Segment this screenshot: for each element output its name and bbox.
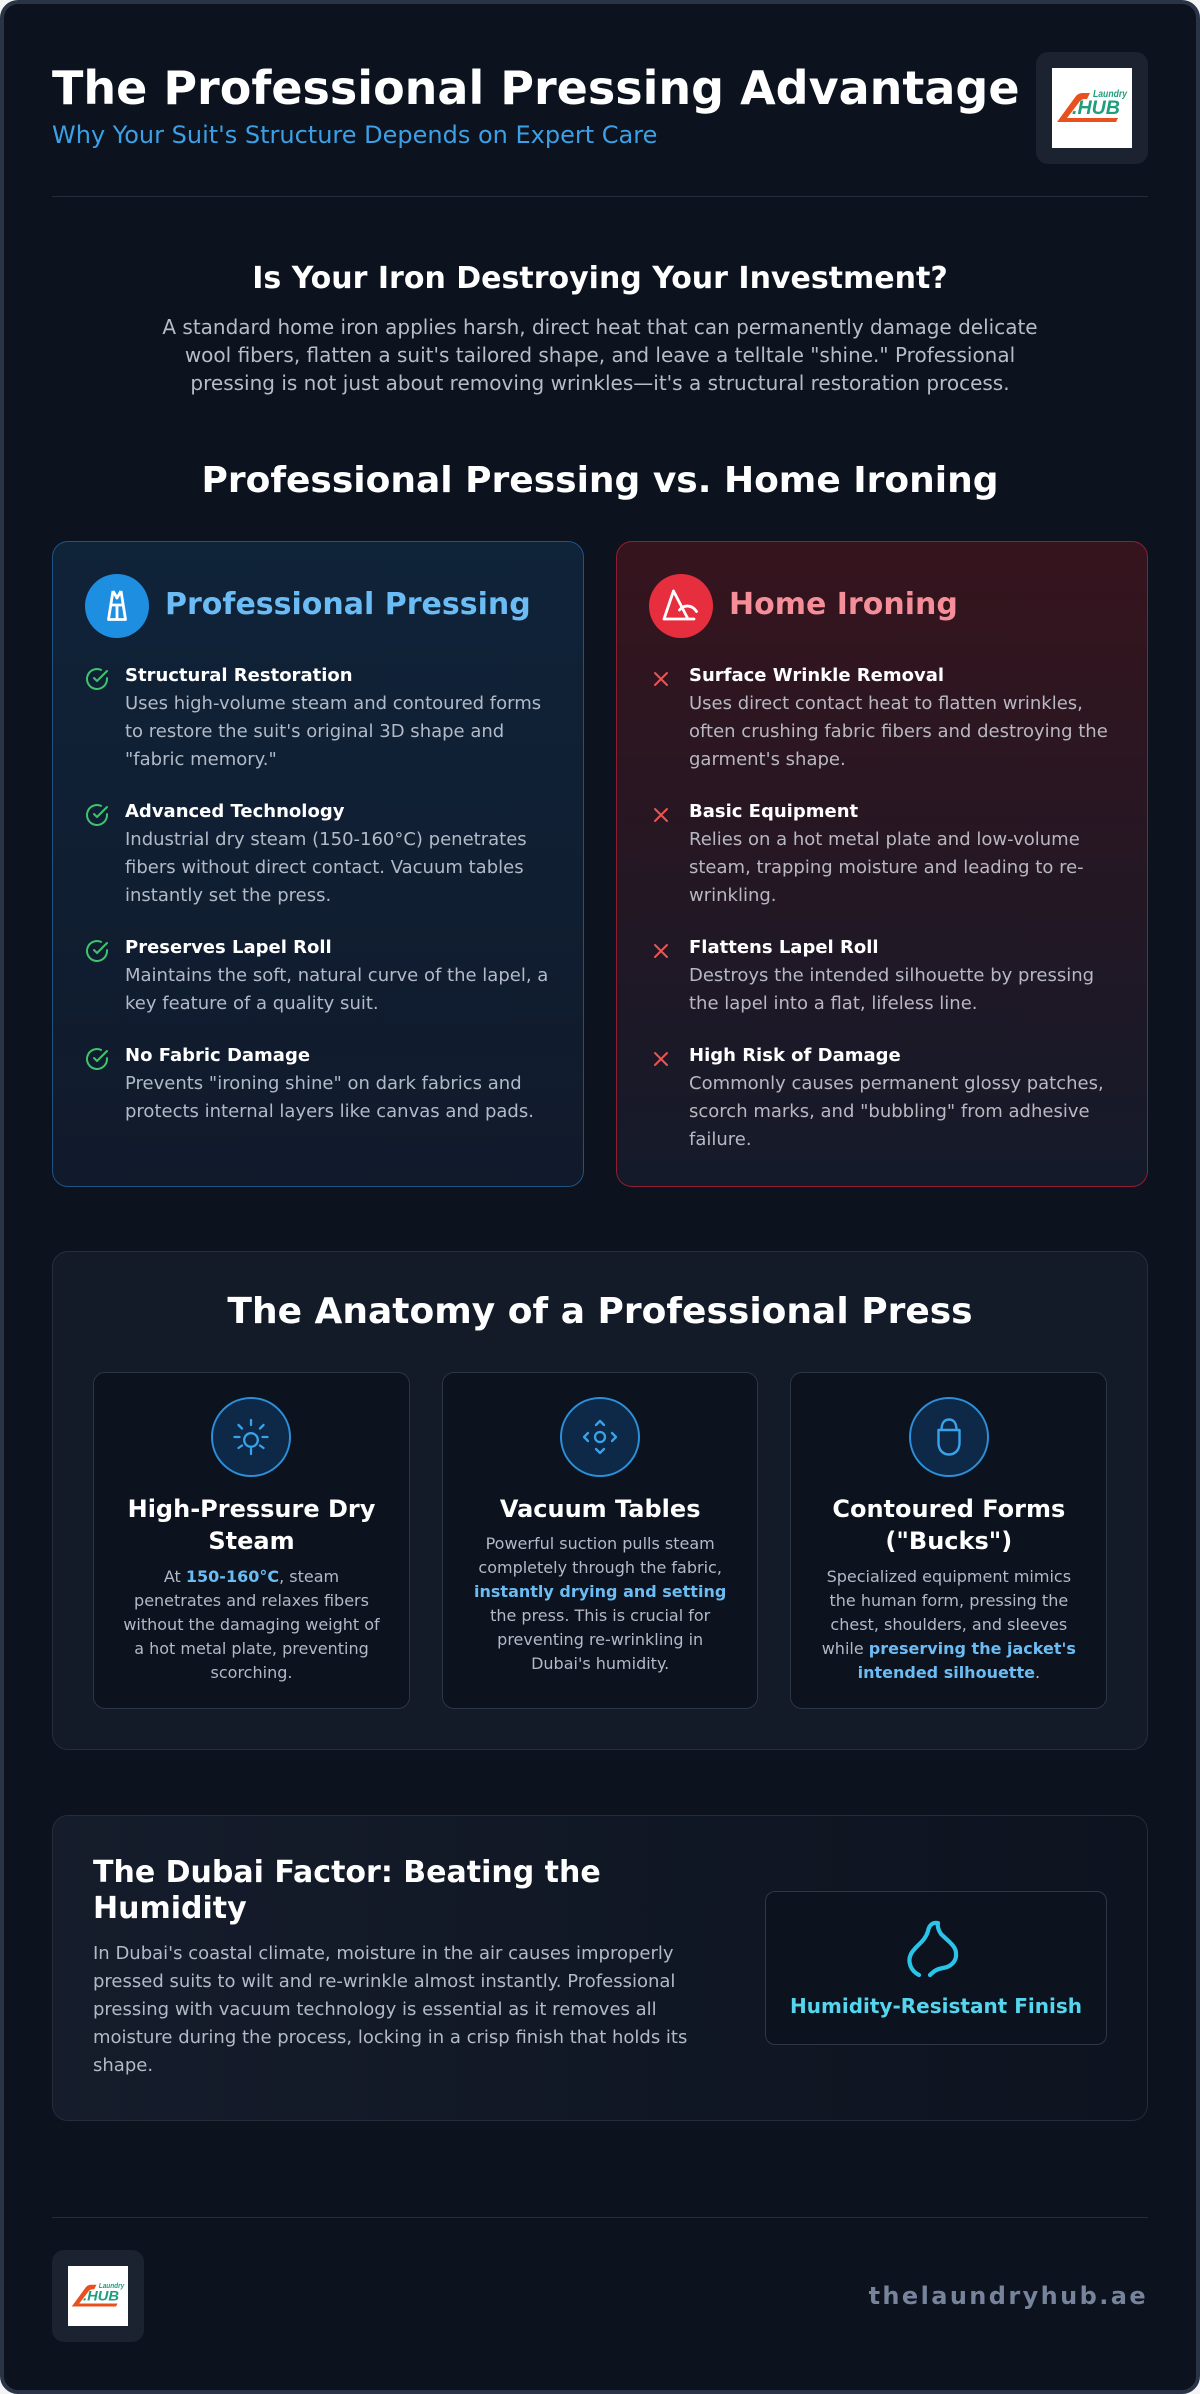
- item: preserves lapel roll: Maintains the soft, natural curve of the lapel, a: [125, 965, 548, 986]
- item: basic equipment: Relies on a hot metal plate and low-volume: [689, 829, 1080, 850]
- intro paragraph: pressing is not just about removing wrinkles—it's a structural restoration process.: [190, 371, 1010, 395]
- dubai heading: [93, 1855, 601, 1926]
- card: high-pressure dry steam: [93, 1372, 410, 1709]
- item: advanced technology: fibers without direct contact. Vacuum tables: [125, 857, 524, 878]
- item: structural restoration: to restore the suit's original 3D shape and: [125, 721, 504, 742]
- panel: dubai factor: [52, 1815, 1148, 2121]
- forms text: while preserving the jacket's: [822, 1639, 1076, 1658]
- item: basic equipment: steam, trapping moisture and leading to re-: [689, 857, 1084, 878]
- icon: iron warning: [649, 574, 713, 638]
- dubai text: pressed suits to wilt and re-wrinkle almost instantly. Professional: [93, 1971, 675, 1992]
- item: flattens lapel roll: the lapel into a flat, lifeless line.: [689, 993, 978, 1014]
- panel: anatomy: [52, 1251, 1148, 1750]
- icon: vacuum: [560, 1397, 640, 1477]
- item: surface wrinkle removal: often crushing fabric fibers and destroying the: [689, 721, 1108, 742]
- professional pressing heading: Professional Pressing: [165, 587, 531, 622]
- vacuum heading: Vacuum Tables: [500, 1495, 700, 1523]
- icon: suit: [85, 574, 149, 638]
- steam heading: Steam: [208, 1527, 295, 1555]
- item: structural restoration: Structural Restoration: [125, 665, 353, 686]
- icon: droplet: [907, 1920, 958, 1978]
- item: no fabric damage: No Fabric Damage: [125, 1045, 310, 1066]
- item: surface wrinkle removal: [654, 665, 1108, 770]
- vacuum text: completely through the fabric,: [478, 1558, 722, 1577]
- dubai text: shape.: [93, 2055, 153, 2076]
- forms heading: [832, 1495, 1065, 1555]
- vacuum text: Powerful suction pulls steam: [486, 1534, 715, 1553]
- logo: header: [1036, 52, 1148, 164]
- item: high risk of damage: [654, 1045, 1104, 1150]
- logo: header: .HUB: [1072, 98, 1120, 119]
- intro paragraph: wool fibers, flatten a suit's tailored shape, and leave a telltale "shine." Professional: [185, 343, 1015, 367]
- logo: footer: Laundry: [99, 2281, 125, 2290]
- intro paragraph: A standard home iron applies harsh, direct heat that can permanently damage delicate: [162, 315, 1038, 339]
- steam text: At 150-160°C, steam: [164, 1567, 339, 1586]
- intro paragraph: [162, 315, 1038, 395]
- item: no fabric damage: [86, 1045, 534, 1122]
- logo: footer: .HUB: [83, 2288, 119, 2305]
- forms text: intended silhouette.: [858, 1663, 1040, 1682]
- item: basic equipment: Basic Equipment: [689, 801, 858, 822]
- forms text: Specialized equipment mimics: [827, 1567, 1071, 1586]
- item: no fabric damage: Prevents "ironing shine" on dark fabrics and: [125, 1073, 522, 1094]
- steam heading: [128, 1495, 375, 1555]
- item: preserves lapel roll: [86, 937, 548, 1014]
- dubai text: moisture during the process, locking in a crisp finish that holds its: [93, 2027, 687, 2048]
- logo: footer: [52, 2250, 144, 2342]
- panel: professional pressing: [52, 541, 584, 1187]
- home ironing heading: Home Ironing: [729, 587, 958, 622]
- footer url: thelaundryhub.ae: [869, 2282, 1148, 2310]
- dubai heading: The Dubai Factor: Beating the: [93, 1855, 601, 1890]
- vacuum text: instantly drying and setting: [474, 1582, 726, 1601]
- card: vacuum tables: [442, 1372, 758, 1709]
- vacuum text: [474, 1534, 726, 1673]
- item: surface wrinkle removal: Uses direct contact heat to flatten wrinkles,: [689, 693, 1083, 714]
- steam text: without the damaging weight of: [123, 1615, 380, 1634]
- icon: sun: [211, 1397, 291, 1477]
- item: high risk of damage: Commonly causes permanent glossy patches,: [689, 1073, 1104, 1094]
- item: flattens lapel roll: [654, 937, 1094, 1014]
- callout label: Humidity-Resistant Finish: [790, 1994, 1082, 2018]
- anatomy heading: The Anatomy of a Professional Press: [227, 1291, 973, 1332]
- forms text: chest, shoulders, and sleeves: [830, 1615, 1067, 1634]
- vacuum text: Dubai's humidity.: [531, 1654, 669, 1673]
- item: advanced technology: Industrial dry steam (150-160°C) penetrates: [125, 829, 527, 850]
- vacuum text: preventing re-wrinkling in: [497, 1630, 703, 1649]
- dubai heading: Humidity: [93, 1891, 247, 1926]
- comparison heading: Professional Pressing vs. Home Ironing: [201, 460, 999, 501]
- dubai text: In Dubai's coastal climate, moisture in the air causes improperly: [93, 1943, 674, 1964]
- logo: header: Laundry: [1093, 89, 1127, 100]
- forms text: [822, 1567, 1076, 1682]
- item: structural restoration: [86, 665, 541, 770]
- item: advanced technology: [86, 801, 527, 906]
- item: surface wrinkle removal: garment's shape.: [689, 749, 846, 770]
- subtitle: Why Your Suit's Structure Depends on Expert Care: [52, 121, 657, 149]
- item: basic equipment: [654, 801, 1084, 906]
- steam text: a hot metal plate, preventing: [134, 1639, 369, 1658]
- callout: humidity-resistant finish: [765, 1891, 1107, 2045]
- item: advanced technology: Advanced Technology: [125, 801, 344, 822]
- item: advanced technology: instantly set the press.: [125, 885, 331, 906]
- dubai text: [93, 1943, 687, 2076]
- title: The Professional Pressing Advantage: [52, 61, 1020, 115]
- item: preserves lapel roll: key feature of a quality suit.: [125, 993, 379, 1014]
- item: flattens lapel roll: Destroys the intended silhouette by pressing: [689, 965, 1094, 986]
- panel: home ironing: [616, 541, 1148, 1187]
- forms heading: Contoured Forms: [832, 1495, 1065, 1523]
- item: high risk of damage: High Risk of Damage: [689, 1045, 901, 1066]
- forms text: the human form, pressing the: [829, 1591, 1068, 1610]
- item: surface wrinkle removal: Surface Wrinkle Removal: [689, 665, 944, 686]
- icon: buck form: [909, 1397, 989, 1477]
- steam text: [123, 1567, 380, 1682]
- vacuum text: the press. This is crucial for: [490, 1606, 710, 1625]
- item: high risk of damage: scorch marks, and "bubbling" from adhesive: [689, 1101, 1090, 1122]
- item: basic equipment: wrinkling.: [689, 885, 777, 906]
- item: flattens lapel roll: Flattens Lapel Roll: [689, 937, 879, 958]
- item: no fabric damage: protects internal layers like canvas and pads.: [125, 1101, 534, 1122]
- steam text: penetrates and relaxes fibers: [134, 1591, 369, 1610]
- steam text: scorching.: [211, 1663, 292, 1682]
- dubai text: pressing with vacuum technology is essential as it removes all: [93, 1999, 657, 2020]
- item: structural restoration: Uses high-volume steam and contoured forms: [125, 693, 541, 714]
- item: preserves lapel roll: Preserves Lapel Roll: [125, 937, 332, 958]
- item: high risk of damage: failure.: [689, 1129, 752, 1150]
- intro heading: Is Your Iron Destroying Your Investment?: [252, 261, 948, 296]
- steam heading: High-Pressure Dry: [128, 1495, 375, 1523]
- item: structural restoration: "fabric memory.": [125, 749, 277, 770]
- card: contoured forms: [790, 1372, 1107, 1709]
- forms heading: ("Bucks"): [885, 1527, 1012, 1555]
